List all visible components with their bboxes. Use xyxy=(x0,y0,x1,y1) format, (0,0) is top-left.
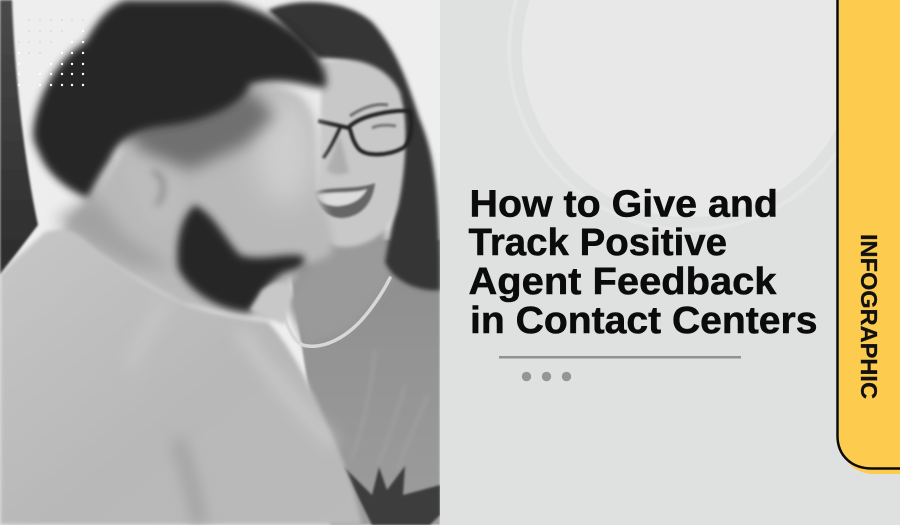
man neck shade xyxy=(55,195,175,270)
man hair xyxy=(33,0,326,198)
title xyxy=(468,184,818,342)
dot grid xyxy=(18,19,84,86)
man shirt xyxy=(0,230,362,525)
man face highlight xyxy=(255,95,315,205)
tab label: INFOGRAPHIC xyxy=(856,234,882,399)
woman glasses xyxy=(318,111,411,158)
background panel xyxy=(440,0,900,525)
woman dress xyxy=(285,240,440,525)
plant xyxy=(343,466,440,525)
yellow tab xyxy=(838,0,900,474)
title: Agent Feedback xyxy=(468,261,777,303)
woman hair xyxy=(268,2,440,290)
man beard xyxy=(177,205,304,312)
title: Track Positive xyxy=(468,222,727,264)
man side shade xyxy=(125,90,275,170)
woman dress folds xyxy=(350,350,428,470)
woman face xyxy=(317,60,405,247)
woman nose shade xyxy=(326,135,350,174)
man neck and face xyxy=(60,85,333,320)
woman neck xyxy=(285,225,392,345)
three dots xyxy=(522,372,571,381)
woman eyebrow xyxy=(350,105,388,116)
title: How to Give and xyxy=(470,184,778,226)
man mouth highlight xyxy=(250,283,292,325)
man ear xyxy=(122,138,168,206)
woman necklace xyxy=(281,278,390,346)
divider line xyxy=(499,356,741,358)
dark left strip xyxy=(0,0,38,275)
woman smile xyxy=(313,183,375,218)
title: in Contact Centers xyxy=(470,300,818,342)
photo: man and woman xyxy=(0,0,440,525)
shirt shading xyxy=(172,338,339,525)
decorative circle xyxy=(522,0,836,217)
